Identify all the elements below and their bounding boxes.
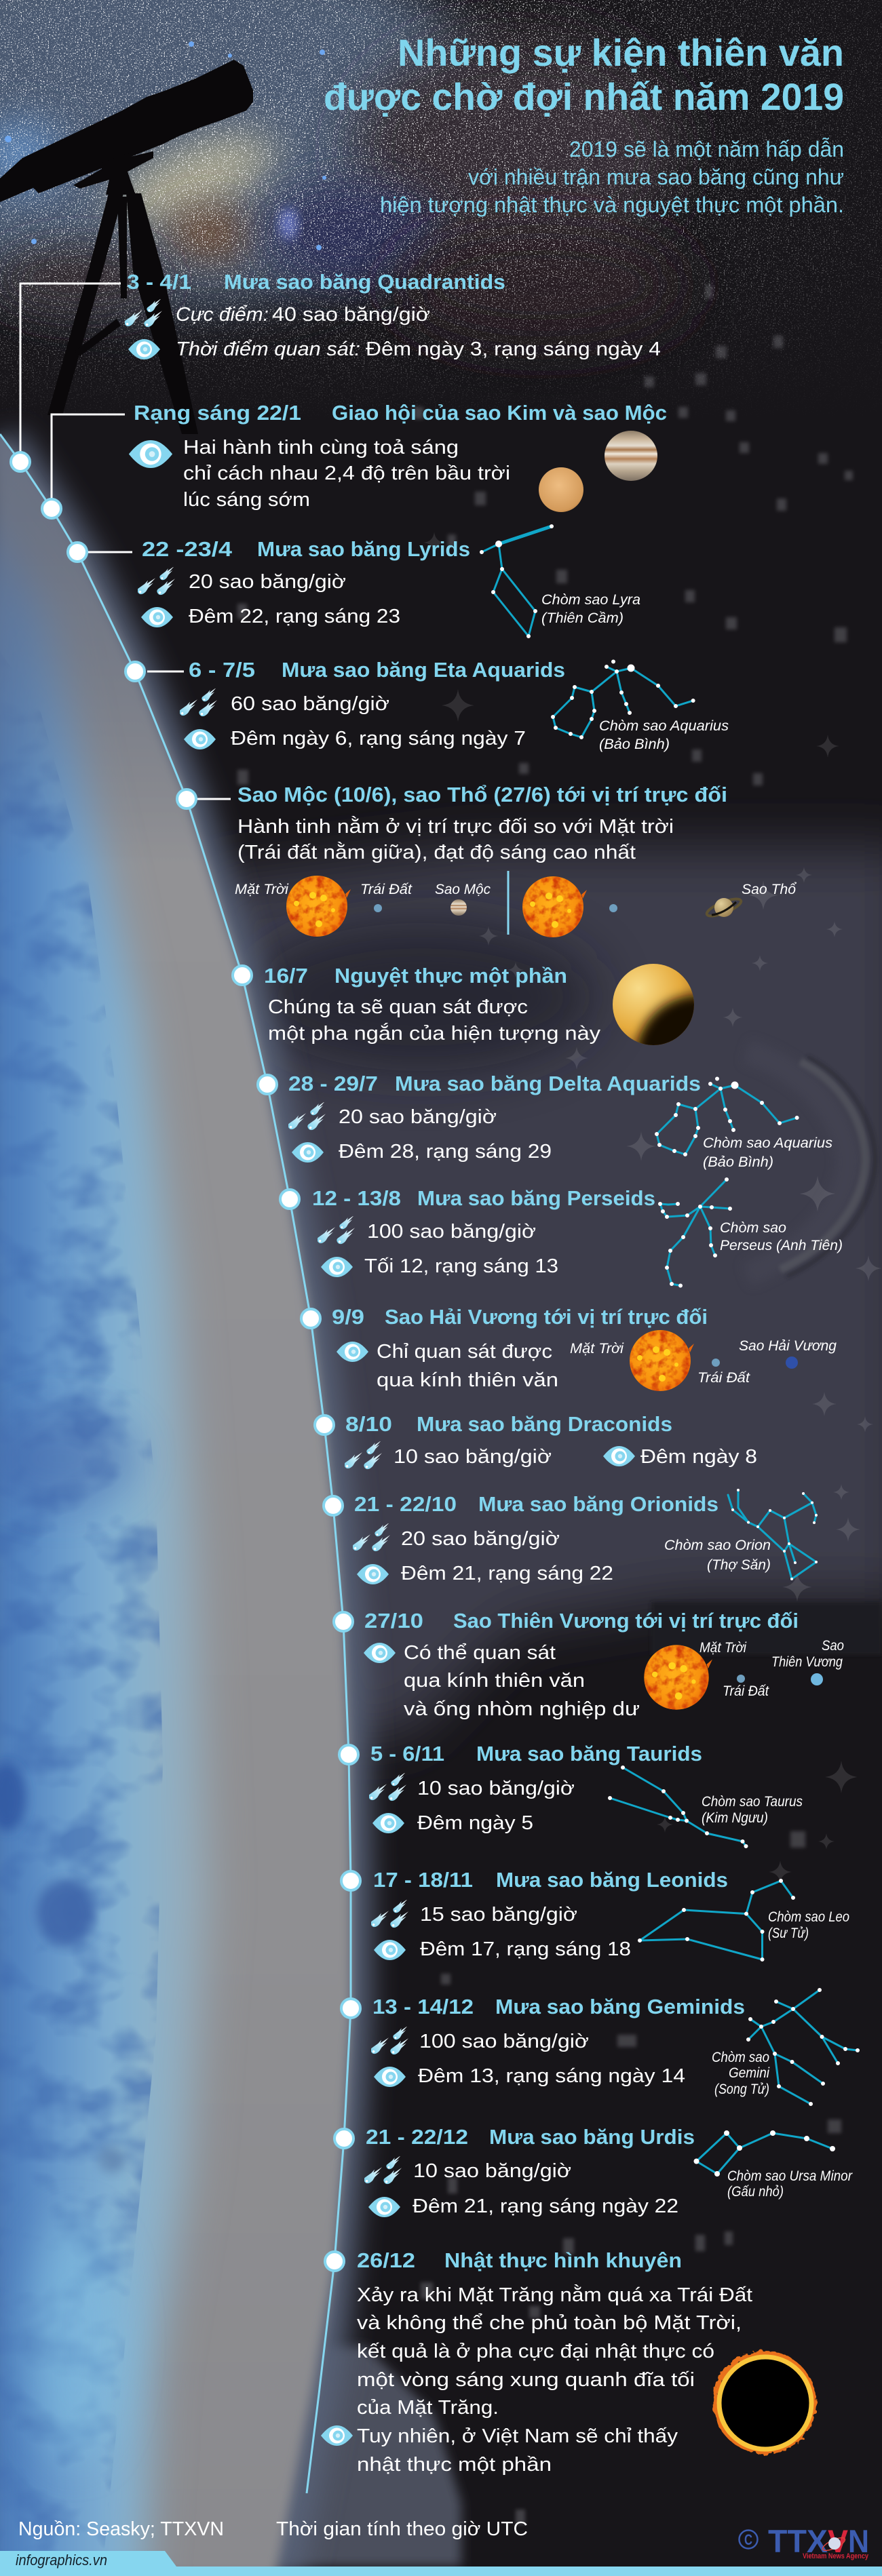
event: Jupiter and Saturn opposition: Sao Mộc (10/6), sao Thổ (27/6) tới vị trí trực đối	[237, 783, 727, 806]
event: Geminids	[341, 1990, 858, 2104]
event: Taurids: Đêm ngày 5	[417, 1812, 533, 1834]
event: Eta Aquarids: Chòm sao Aquarius	[599, 718, 729, 734]
event: Ursids: 10 sao băng/giờ	[413, 2160, 571, 2182]
timeline line	[0, 434, 351, 2493]
logo: TTXVN	[740, 2523, 869, 2560]
event: Jupiter and Saturn opposition: Hành tinh nằm ở vị trí trực đối so với Mặt trời	[237, 815, 674, 838]
event: Lyrids: 20 sao băng/giờ	[189, 571, 346, 593]
event: Neptune opposition	[301, 1305, 837, 1391]
event: Ursids	[334, 2125, 853, 2217]
event: Neptune opposition: Sao Hải Vương tới vị trí trực đối	[385, 1305, 708, 1329]
event: Lyrids: (Thiên Cầm)	[541, 610, 624, 626]
event: Venus-Jupiter conjunction: Hai hành tinh cùng toả sáng	[183, 437, 459, 458]
event: Eta Aquarids: 6 - 7/5	[189, 658, 255, 682]
event: Uranus opposition: Trái Đất	[723, 1683, 769, 1699]
logo: TTXVN: N	[848, 2523, 869, 2559]
event: annular solar eclipse: Tuy nhiên, ở Việt Nam sẽ chỉ thấy	[357, 2425, 678, 2447]
event: annular solar eclipse	[321, 2248, 813, 2476]
event: Jupiter and Saturn opposition: Trái Đất	[360, 882, 413, 897]
event: Uranus opposition	[334, 1609, 844, 1720]
event: Venus-Jupiter conjunction: Rạng sáng 22/1	[134, 401, 301, 425]
constellation: Taurus	[610, 1768, 746, 1846]
event: Taurids: 10 sao băng/giờ	[417, 1778, 575, 1799]
icon: Jupiter	[605, 431, 657, 481]
intro text: 2019 sẽ là một năm hấp dẫn	[569, 137, 844, 161]
event: Quadrantids: Thời điểm quan sát:	[176, 338, 360, 360]
event: Delta Aquarids	[258, 1072, 833, 1170]
event: Uranus opposition: 27/10	[364, 1609, 423, 1633]
event: Neptune opposition: Mặt Trời	[570, 1341, 624, 1357]
event: annular solar eclipse: Nhật thực hình khuyên	[444, 2248, 682, 2272]
event: annular solar eclipse: 26/12	[357, 2248, 415, 2272]
event: Uranus opposition: Mặt Trời	[699, 1640, 747, 1656]
event: Quadrantids: 40 sao băng/giờ	[272, 304, 430, 326]
event: annular solar eclipse: của Mặt Trăng.	[357, 2397, 499, 2419]
event: Taurids: Mưa sao băng Taurids	[476, 1742, 702, 1765]
event: Quadrantids: Mưa sao băng Quadrantids	[224, 270, 505, 294]
icon: Sun	[644, 1645, 712, 1710]
event: Eta Aquarids: (Bảo Bình)	[599, 737, 670, 752]
event: Jupiter and Saturn opposition	[177, 783, 797, 937]
event: Orionids: 20 sao băng/giờ	[401, 1528, 560, 1550]
icon: Saturn	[705, 895, 743, 920]
event: Neptune opposition: qua kính thiên văn	[377, 1369, 558, 1391]
event: Lyrids	[68, 526, 640, 636]
event: Draconids: 8/10	[345, 1412, 392, 1436]
icon: eclipsed moon	[613, 964, 694, 1045]
event: Leonids: Mưa sao băng Leonids	[496, 1868, 728, 1892]
event: Uranus opposition: và ống nhòm nghiệp dư	[404, 1698, 640, 1720]
icon: Sun	[630, 1330, 694, 1391]
event: Leonids: Chòm sao Leo	[768, 1909, 849, 1925]
event: Quadrantids	[11, 270, 661, 471]
event: partial lunar eclipse: Chúng ta sẽ quan sát được	[268, 996, 528, 1018]
event: Eta Aquarids: Đêm ngày 6, rạng sáng ngày 7	[231, 728, 526, 749]
event: Jupiter and Saturn opposition: Sao Thổ	[742, 882, 797, 897]
title	[324, 31, 844, 118]
icon: telescope silhouette	[0, 60, 253, 434]
event: Geminids: Đêm 13, rạng sáng ngày 14	[418, 2065, 685, 2087]
event: Venus-Jupiter conjunction: lúc sáng sớm	[183, 489, 310, 511]
icon: Sun	[286, 876, 351, 937]
title: được chờ đợi nhất năm 2019	[324, 75, 844, 118]
event: Ursids: (Gấu nhỏ)	[727, 2184, 784, 2200]
event: Geminids: (Song Tử)	[714, 2082, 769, 2097]
event: Geminids: Chòm sao	[712, 2050, 769, 2065]
constellation: Perseus	[660, 1179, 730, 1286]
event: Venus-Jupiter conjunction: chỉ cách nhau 2,4 độ trên bầu trời	[183, 463, 510, 484]
event: annular solar eclipse: một vòng sáng xung quanh đĩa tối	[357, 2369, 695, 2391]
event: Perseids: Tối 12, rạng sáng 13	[364, 1255, 558, 1277]
logo: TTXVN: TTX	[768, 2523, 828, 2559]
event: Lyrids: Chòm sao Lyra	[541, 592, 640, 608]
event: Taurids: (Kim Ngưu)	[702, 1810, 768, 1826]
event: Taurids	[339, 1742, 803, 1846]
event: Orionids	[324, 1490, 816, 1584]
event: Draconids: 10 sao băng/giờ	[394, 1446, 552, 1468]
event: Delta Aquarids: 28 - 29/7	[288, 1072, 378, 1095]
event: Geminids: 100 sao băng/giờ	[419, 2031, 589, 2052]
logo: TTXVN: Vietnam News Agency	[803, 2552, 869, 2560]
constellation: Gemini	[748, 1990, 858, 2104]
event: Jupiter and Saturn opposition: (Trái đất nằm giữa), đạt độ sáng cao nhất	[237, 841, 636, 863]
event: Neptune opposition: Chỉ quan sát được	[377, 1341, 552, 1363]
constellation: Aquarius	[657, 1078, 797, 1154]
event: Draconids: Mưa sao băng Draconids	[417, 1412, 672, 1436]
event: Delta Aquarids: 20 sao băng/giờ	[339, 1106, 497, 1128]
event: Lyrids: Đêm 22, rạng sáng 23	[189, 606, 400, 627]
event: Perseids: Mưa sao băng Perseids	[417, 1186, 655, 1210]
intro text: hiện tượng nhật thực và nguyệt thực một phần.	[380, 193, 844, 217]
event: Leonids: 17 - 18/11	[373, 1868, 473, 1892]
event: Orionids: Đêm 21, rạng sáng 22	[401, 1563, 613, 1584]
event: Quadrantids: Cực điểm:	[176, 304, 269, 326]
event: Taurids: Chòm sao Taurus	[702, 1794, 803, 1810]
event: Orionids: Mưa sao băng Orionids	[478, 1492, 718, 1516]
icon: solar eclipse ring	[716, 2354, 813, 2451]
event: Ursids: Mưa sao băng Urdis	[489, 2125, 695, 2149]
event: Uranus opposition: Sao	[822, 1638, 844, 1654]
event: Perseids: 100 sao băng/giờ	[367, 1221, 536, 1243]
event: Ursids: 21 - 22/12	[366, 2125, 468, 2149]
intro text: với nhiều trận mưa sao băng cũng như	[468, 165, 844, 189]
event: Uranus opposition: Sao Thiên Vương tới vị trí trực đối	[453, 1609, 799, 1633]
event: annular solar eclipse: và không thể che phủ toàn bộ Mặt Trời,	[357, 2312, 742, 2334]
event: Quadrantids: 3 - 4/1	[127, 270, 191, 294]
event: Lyrids: 22 -23/4	[142, 537, 233, 561]
event: Perseids: Chòm sao	[720, 1220, 786, 1236]
event: annular solar eclipse: Xảy ra khi Mặt Trăng nằm quá xa Trái Đất	[357, 2284, 752, 2306]
event: partial lunar eclipse	[231, 964, 694, 1045]
event: Orionids: (Thợ Săn)	[707, 1557, 771, 1573]
event: Geminids: Gemini	[729, 2065, 770, 2081]
event: Draconids: Đêm ngày 8	[640, 1446, 757, 1468]
event: Neptune opposition: 9/9	[332, 1305, 364, 1329]
intro text	[380, 137, 844, 217]
event: partial lunar eclipse: 16/7	[264, 964, 308, 988]
footer bar	[0, 2551, 882, 2576]
event: Eta Aquarids: Mưa sao băng Eta Aquarids	[282, 658, 565, 682]
constellation: Orion	[728, 1490, 816, 1579]
logo: TTXVN: V	[828, 2523, 849, 2559]
icon: Venus	[539, 467, 583, 512]
event: Taurids: 5 - 6/11	[370, 1742, 444, 1765]
event: Draconids	[315, 1412, 757, 1471]
event: Venus-Jupiter conjunction	[42, 401, 667, 518]
event: Uranus opposition: qua kính thiên văn	[404, 1670, 585, 1692]
event: Leonids: 15 sao băng/giờ	[420, 1904, 577, 1926]
event: Ursids: Đêm 21, rạng sáng ngày 22	[413, 2196, 678, 2217]
event: Perseids: 12 - 13/8	[312, 1186, 401, 1210]
event: annular solar eclipse: nhật thực một phần	[357, 2454, 552, 2476]
title: Những sự kiện thiên văn	[398, 31, 844, 74]
event: Uranus opposition: Có thể quan sát	[404, 1642, 556, 1664]
event: Orionids: Chòm sao Orion	[664, 1538, 771, 1553]
event: Quadrantids: Đêm ngày 3, rạng sáng ngày 4	[366, 338, 661, 360]
logo: TTXVN: C	[744, 2531, 752, 2548]
constellation: Lyra	[482, 526, 552, 636]
event: Neptune opposition: Trái Đất	[697, 1370, 750, 1386]
source line: Nguồn: Seasky; TTXVN	[18, 2518, 224, 2540]
event: Eta Aquarids	[126, 658, 729, 752]
event: Geminids: Mưa sao băng Geminids	[495, 1995, 745, 2018]
event: Delta Aquarids: Đêm 28, rạng sáng 29	[339, 1141, 552, 1163]
event: Jupiter and Saturn opposition: Mặt Trời	[235, 882, 289, 897]
event: Venus-Jupiter conjunction: Giao hội của sao Kim và sao Mộc	[332, 401, 667, 425]
event: Leonids	[341, 1868, 849, 1960]
source line	[18, 2518, 528, 2540]
event: Leonids: Đêm 17, rạng sáng 18	[420, 1938, 631, 1960]
event: Perseids: Perseus (Anh Tiên)	[720, 1238, 843, 1253]
event: Geminids: 13 - 14/12	[372, 1995, 474, 2018]
event: Ursids: Chòm sao Ursa Minor	[727, 2168, 853, 2184]
event: Eta Aquarids: 60 sao băng/giờ	[231, 693, 389, 715]
constellation: Ursa Minor	[696, 2133, 832, 2174]
event: partial lunar eclipse: một pha ngắn của hiện tượng này	[268, 1022, 601, 1045]
event: Perseids	[280, 1179, 843, 1286]
event: Lyrids: Mưa sao băng Lyrids	[257, 537, 470, 561]
event: Neptune opposition: Sao Hải Vương	[739, 1338, 837, 1354]
constellation: Leo	[640, 1881, 793, 1959]
event: Delta Aquarids: Chòm sao Aquarius	[703, 1135, 833, 1151]
event: Uranus opposition: Thiên Vương	[771, 1654, 843, 1670]
source line: Thời gian tính theo giờ UTC	[276, 2518, 528, 2540]
event: Orionids: 21 - 22/10	[354, 1492, 457, 1516]
constellation: Aquarius	[553, 662, 693, 737]
icon: Sun 2	[522, 876, 587, 937]
event: Jupiter and Saturn opposition: Sao Mộc	[435, 882, 491, 897]
event: annular solar eclipse: kết quả là ở pha cực đại nhật thực có	[357, 2341, 714, 2362]
event: Leonids: (Sư Tử)	[768, 1926, 809, 1941]
event: Delta Aquarids: Mưa sao băng Delta Aquarids	[395, 1072, 701, 1095]
event: Delta Aquarids: (Bảo Bình)	[703, 1154, 773, 1170]
footer bar: infographics.vn	[16, 2552, 107, 2569]
event: partial lunar eclipse: Nguyệt thực một phần	[334, 964, 567, 988]
